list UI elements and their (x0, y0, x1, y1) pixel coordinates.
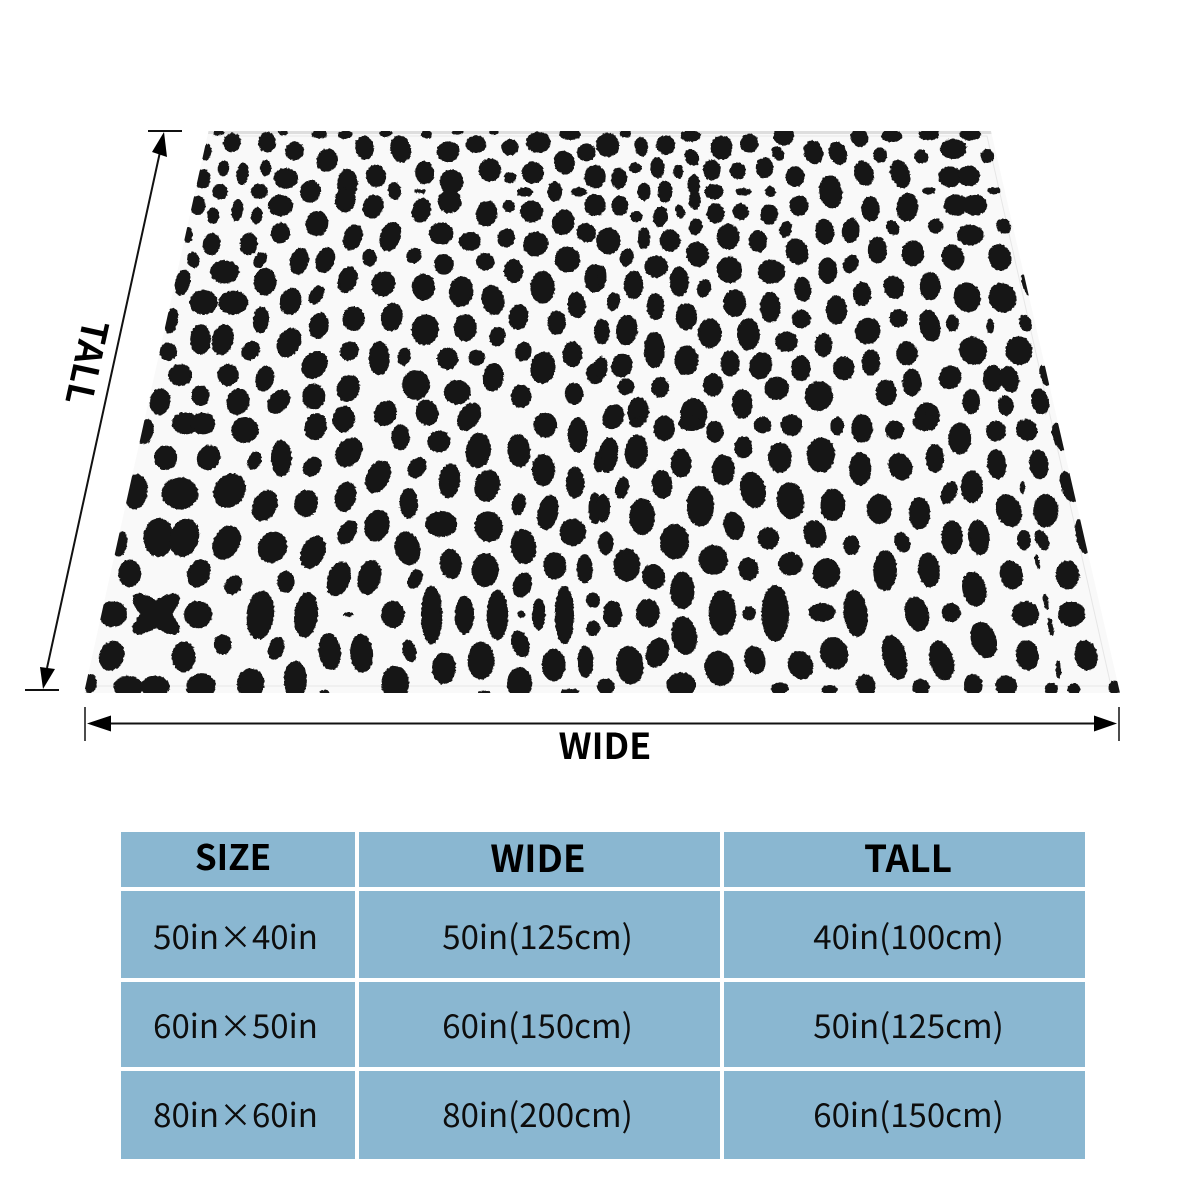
arrow: wide dimension (85, 707, 1119, 741)
row: 60in x 50in (121, 982, 1085, 1067)
row: 80in x 60in: 60in(150cm) (813, 1089, 1004, 1137)
row: 50in x 40in: 50in×40in (153, 910, 318, 958)
row: 60in x 50in: 50in(125cm) (813, 1000, 1004, 1048)
arrow: tall dimension (25, 131, 182, 690)
blanket with spotted pattern (84, 126, 1120, 703)
header row (121, 828, 1085, 887)
row: 50in x 40in: 40in(100cm) (813, 910, 1004, 958)
row: 60in x 50in: 60in(150cm) (442, 1000, 633, 1048)
label: WIDE: WIDE (559, 718, 651, 770)
header row: TALL (864, 828, 952, 882)
size table (121, 828, 1085, 1159)
row: 60in x 50in: 60in×50in (153, 1000, 318, 1048)
row: 50in x 40in (121, 891, 1085, 978)
row: 80in x 60in: 80in×60in (153, 1089, 318, 1137)
row: 80in x 60in (121, 1071, 1085, 1159)
label: TALL: TALL (54, 316, 124, 410)
row: 50in x 40in: 50in(125cm) (442, 910, 633, 958)
row: 80in x 60in: 80in(200cm) (442, 1089, 633, 1137)
header row: SIZE (195, 830, 271, 881)
header row: WIDE (490, 828, 586, 882)
